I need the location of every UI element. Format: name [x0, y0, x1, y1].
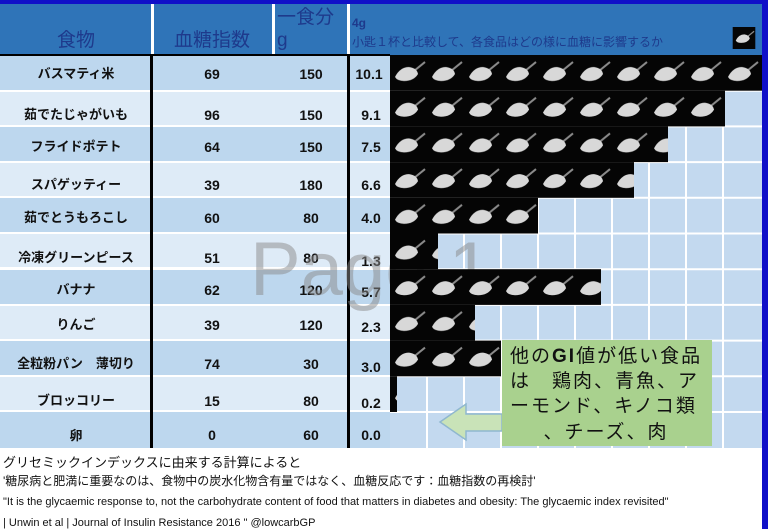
table rows: バナナ [56, 282, 96, 297]
header bar: g [277, 30, 288, 51]
table rows: 6.6 [361, 177, 381, 193]
table rows: 62 [204, 282, 220, 298]
header bar [0, 0, 768, 55]
table rows: 39 [204, 177, 220, 193]
footer: グリセミックインデックスに由来する計算によると [3, 455, 301, 470]
table rows: 69 [204, 66, 220, 82]
table rows: 80 [303, 210, 319, 226]
table rows: 51 [204, 250, 220, 266]
header bar: 食物 [57, 29, 95, 51]
table rows: 150 [299, 139, 323, 155]
table rows: 60 [204, 210, 220, 226]
table rows: 150 [299, 66, 323, 82]
table rows: 冷凍グリーンピース [18, 250, 134, 265]
footer: | Unwin et al | Journal of Insulin Resistance 2016 " @lowcarbGP [3, 517, 315, 529]
header bar: 4g [352, 16, 366, 30]
table rows: ブロッコリー [37, 393, 115, 408]
table rows: 茹でたじゃがいも [24, 107, 128, 122]
table rows: りんご [56, 317, 96, 332]
table rows: 15 [204, 393, 220, 409]
table rows: フライドポテト [30, 139, 122, 154]
table rows: 150 [299, 107, 323, 123]
table rows: 5.7 [361, 284, 381, 300]
table rows: 9.1 [361, 107, 381, 123]
table rows: 3.0 [361, 359, 381, 375]
right border [762, 0, 768, 529]
footer [3, 455, 669, 529]
table rows: 120 [299, 317, 323, 333]
table rows: 120 [299, 282, 323, 298]
table rows: 0 [208, 427, 216, 443]
table rows: 96 [204, 107, 220, 123]
table rows: 180 [299, 177, 323, 193]
table rows: 7.5 [361, 139, 381, 155]
callout: ーモンド、キノコ類 [510, 395, 697, 417]
watermark: Page 1 [250, 227, 491, 312]
table rows: 10.1 [355, 66, 383, 82]
table rows: 1.3 [361, 253, 381, 269]
table rows: 全粒粉パン 薄切り [17, 356, 135, 371]
table rows: 64 [204, 139, 220, 155]
table rows: 0.0 [361, 427, 381, 443]
table rows: バスマティ米 [38, 66, 114, 81]
callout: は 鶏肉、青魚、ア [510, 370, 699, 392]
table rows: 2.3 [361, 319, 381, 335]
callout [502, 340, 712, 446]
table rows: 80 [303, 393, 319, 409]
table rows: 39 [204, 317, 220, 333]
spoon bars [390, 55, 762, 412]
header bar: 小匙１杯と比較して、各食品はどの様に血糖に影響するか [352, 34, 663, 49]
table rows: 0.2 [361, 395, 381, 411]
footer: '糖尿病と肥満に重要なのは、食物中の炭水化物含有量ではなく、血糖反応です：血糖指数の再検討' [3, 473, 536, 488]
header bar: 一食分 [277, 6, 334, 28]
header bar: 血糖指数 [174, 29, 250, 51]
table rows: 74 [204, 356, 220, 372]
table rows: 卵 [69, 428, 83, 443]
callout: 、チーズ、肉 [543, 421, 669, 443]
table rows: 60 [303, 427, 319, 443]
table rows: スパゲッティー [31, 177, 121, 192]
table rows: 80 [303, 250, 319, 266]
callout: 他のGI値が低い食品 [510, 345, 702, 367]
table rows: 30 [303, 356, 319, 372]
arrow [440, 404, 502, 440]
table rows: 茹でとうもろこし [24, 210, 128, 225]
table rows: 4.0 [361, 210, 381, 226]
footer: "It is the glycaemic response to, not the carbohydrate content of food that matters in diabetes and obesity: The glycaemic index revisited" [3, 496, 669, 508]
table rows [0, 54, 762, 448]
